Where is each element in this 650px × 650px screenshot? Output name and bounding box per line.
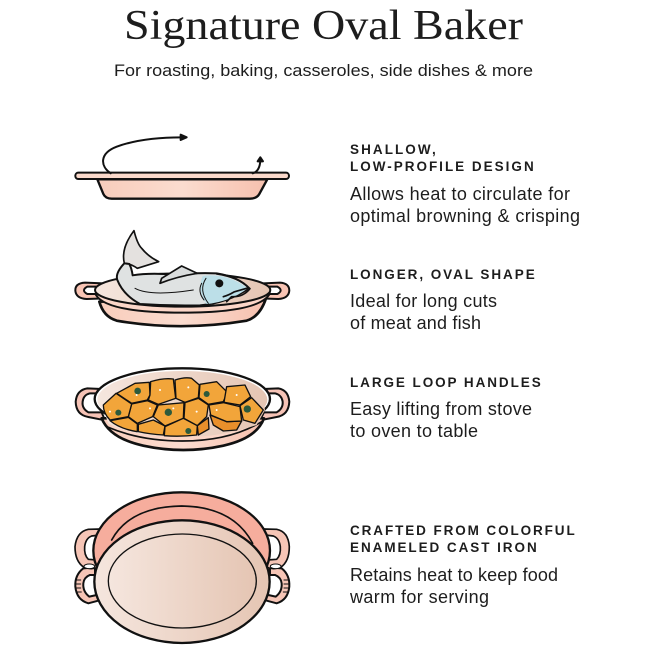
feature: shallow design	[350, 142, 580, 226]
right handle eye	[270, 564, 281, 569]
lower left handle	[75, 567, 103, 603]
fish dorsal fin	[160, 266, 197, 283]
front pan	[94, 520, 270, 643]
heading	[350, 142, 535, 174]
pan interior	[95, 273, 270, 307]
pan body	[97, 179, 267, 199]
left handle eye	[84, 564, 95, 569]
description: Easy lifting from stove	[350, 399, 532, 419]
subtitle: For roasting, baking, casseroles, side dishes & more	[114, 62, 533, 80]
heading: ENAMELED CAST IRON	[350, 540, 538, 555]
lower right handle ribs	[283, 580, 289, 592]
description	[350, 184, 580, 226]
illustration: oval pan with sweet potatoes	[76, 368, 289, 450]
description	[350, 399, 532, 441]
fish head	[200, 275, 248, 304]
herbs	[115, 388, 251, 434]
feature: cast iron	[349, 523, 576, 607]
heading: LOW-PROFILE DESIGN	[350, 159, 535, 174]
pan rim band	[96, 293, 270, 313]
description	[349, 565, 558, 607]
right handle	[260, 283, 289, 299]
left handle	[75, 283, 105, 299]
salt specks	[109, 386, 238, 413]
heading: LARGE LOOP HANDLES	[350, 375, 542, 390]
front pan inner well	[108, 534, 256, 628]
heat arrow large	[103, 135, 187, 173]
fish body	[117, 263, 249, 305]
back pan	[93, 492, 270, 609]
upper left handle	[75, 529, 102, 569]
pan rim	[75, 173, 289, 179]
description: warm for serving	[349, 587, 489, 607]
illustration: oval pan with fish	[75, 231, 289, 326]
illustration: stacked bakers seen from above	[75, 492, 289, 643]
fish eye	[215, 279, 223, 287]
description: to oven to table	[350, 421, 478, 441]
heading: SHALLOW,	[350, 142, 437, 157]
heading: LONGER, OVAL SHAPE	[350, 267, 536, 282]
pan body	[99, 298, 266, 326]
heat arrow small	[253, 157, 263, 173]
heading: CRAFTED FROM COLORFUL	[350, 523, 576, 538]
heading	[350, 523, 576, 555]
description	[350, 291, 497, 333]
pan interior	[95, 368, 270, 430]
pan body	[102, 418, 264, 450]
potato slices	[103, 378, 263, 436]
description: optimal browning & crisping	[350, 206, 580, 226]
description: of meat and fish	[350, 313, 481, 333]
description: Retains heat to keep food	[350, 565, 558, 585]
description: Ideal for long cuts	[350, 291, 497, 311]
feature: oval shape	[350, 267, 536, 333]
illustration: shallow pan with heat arrows	[75, 135, 289, 199]
right loop handle	[260, 388, 289, 420]
fish tail	[124, 231, 159, 268]
description: Allows heat to circulate for	[350, 184, 570, 204]
left loop handle	[76, 388, 105, 420]
fish mouth	[217, 274, 250, 302]
upper right handle	[263, 529, 289, 569]
lower right handle	[262, 567, 289, 603]
lower left handle ribs	[75, 580, 81, 592]
fish gills and lines	[135, 278, 208, 303]
feature: loop handles	[350, 375, 542, 441]
title: Signature Oval Baker	[124, 3, 523, 49]
